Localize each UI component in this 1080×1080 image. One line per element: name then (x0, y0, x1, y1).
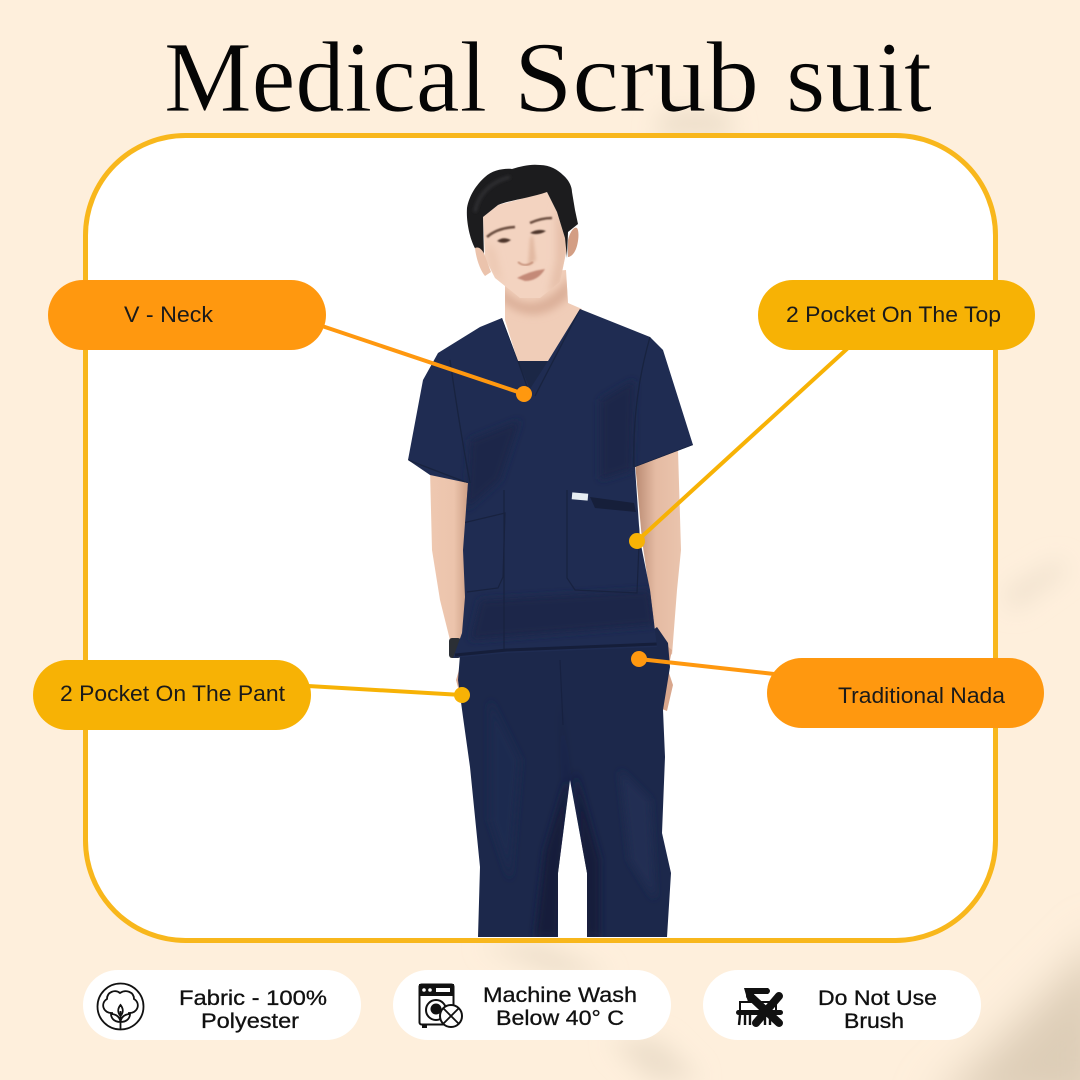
scrub top (408, 309, 693, 658)
callout: 2 Pocket On The Pant: 2 Pocket On The Pant (60, 681, 285, 706)
model head (467, 165, 578, 298)
callout: V - Neck: V - Neck (124, 302, 214, 327)
hair (467, 165, 578, 258)
text: machine wash: Machine Wash (483, 984, 637, 1007)
title (164, 21, 932, 133)
title: Scrub (514, 21, 759, 133)
garment label (572, 492, 588, 501)
text: machine wash (483, 984, 637, 1030)
icon: brush crossed (736, 988, 783, 1025)
text: machine wash: Below 40° C (496, 1007, 624, 1030)
callout dots (454, 386, 647, 703)
title: suit (786, 21, 932, 133)
badge: fabric (83, 970, 361, 1040)
undershirt at neck (518, 361, 548, 389)
text: fabric (179, 987, 327, 1033)
scrub pants (458, 627, 671, 937)
callout: 2 Pocket On The Top (758, 280, 1035, 350)
photo: model wearing navy scrub suit (408, 165, 693, 937)
title: Medical (164, 21, 487, 133)
callout: Traditional Nada (767, 658, 1044, 728)
badge: machine wash (393, 970, 671, 1040)
panel: product frame (86, 136, 996, 940)
model neck (500, 270, 582, 362)
icon: washing machine crossed (419, 984, 462, 1028)
callout connector lines (308, 326, 848, 695)
callout: Traditional Nada: Traditional Nada (838, 683, 1006, 708)
icon: cotton (98, 984, 144, 1030)
badge: no brush (703, 970, 981, 1040)
callout: 2 Pocket On The Pant (33, 660, 311, 730)
callout: 2 Pocket On The Top: 2 Pocket On The Top (786, 302, 1001, 327)
text: fabric: Polyester (201, 1010, 299, 1033)
ears (475, 247, 491, 276)
text: fabric: Fabric - 100% (179, 987, 327, 1010)
text: no brush (818, 987, 937, 1033)
text: no brush: Do Not Use (818, 987, 937, 1010)
callout: V - Neck (48, 280, 326, 350)
text: no brush: Brush (844, 1010, 904, 1033)
model arms and hands (430, 450, 681, 711)
